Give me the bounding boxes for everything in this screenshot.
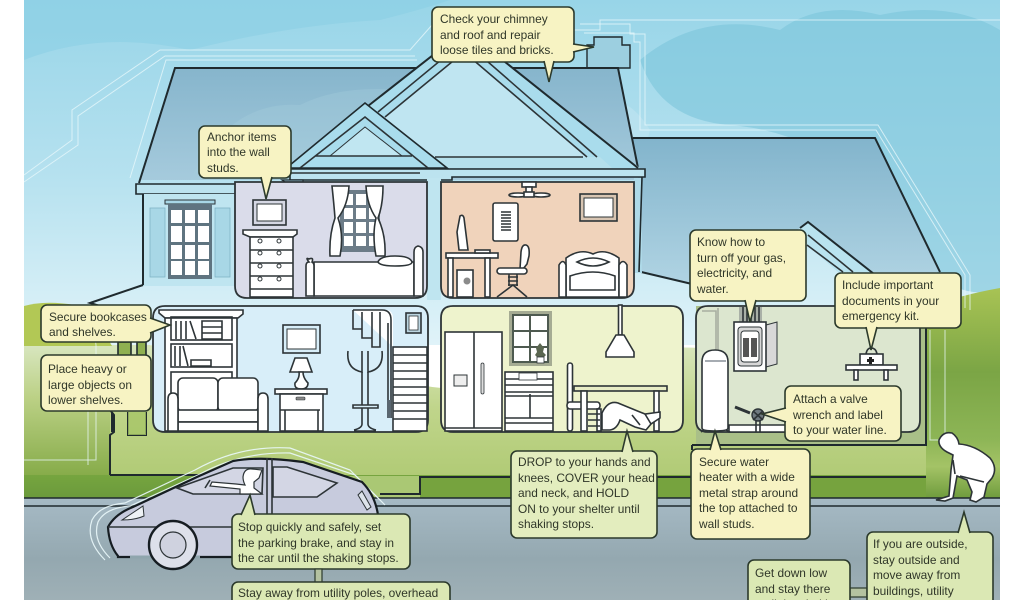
callout: water heater: wall studs. — [698, 517, 755, 531]
dresser — [243, 230, 297, 297]
kneeling person — [936, 433, 995, 502]
callout: outside: move away from — [873, 568, 960, 582]
callout: documents: Include important — [842, 278, 934, 292]
callout: bookcases — [41, 305, 170, 342]
desk and computer — [446, 215, 498, 297]
callout: heavy objects: large objects on — [48, 378, 132, 392]
water heater — [701, 350, 730, 432]
coat rack — [348, 351, 382, 431]
callout: drop cover hold on: knees, COVER your head — [518, 471, 655, 485]
callout: drop cover hold on: DROP to your hands and — [518, 455, 651, 469]
left window — [150, 200, 230, 279]
foundation strip — [420, 477, 926, 497]
callout: utilities — [690, 230, 806, 322]
callout: drop cover hold on — [511, 431, 657, 538]
right small gable — [800, 222, 872, 272]
stairs — [353, 310, 427, 431]
lamp and table — [275, 358, 327, 431]
bedroom window — [330, 186, 385, 256]
room: bedroom — [235, 182, 427, 298]
car — [90, 448, 385, 569]
callout: utilities: Know how to — [697, 235, 765, 249]
motion lines — [90, 448, 380, 560]
callout: water heater: the top attached to — [699, 501, 798, 515]
bookcase — [159, 310, 243, 431]
window — [509, 311, 552, 366]
callout: bookcases: and shelves. — [49, 325, 116, 339]
callout: water heater: heater with a wide — [699, 470, 795, 484]
office picture — [580, 194, 617, 221]
ceiling fan — [509, 182, 550, 197]
stove — [505, 372, 553, 431]
first aid kit — [846, 348, 897, 380]
small frame — [406, 313, 421, 333]
callout: get down low — [748, 560, 850, 600]
poster — [493, 203, 518, 241]
callout: outside — [867, 512, 993, 600]
callout: documents — [835, 273, 961, 350]
callout: stop the car: Stop quickly and safely, set — [238, 520, 382, 534]
callout: utilities: electricity, and — [697, 266, 772, 280]
callout: stop the car: the parking brake, and stay in — [238, 536, 394, 550]
room: utility — [696, 306, 920, 432]
plant — [535, 343, 546, 363]
callout: stop the car: the car until the shaking stops. — [238, 551, 399, 565]
callout: water heater: metal strap around — [699, 486, 798, 500]
office bed — [559, 252, 627, 297]
callout: anchor: Anchor items — [207, 130, 276, 144]
callout: documents: emergency kit. — [842, 309, 919, 323]
bed — [306, 246, 423, 296]
left lower walls and foundation — [110, 410, 146, 475]
callout: valve wrench: wrench and label — [792, 408, 883, 422]
sofa — [168, 378, 268, 431]
callout: drop cover hold on: ON to your shelter until — [518, 502, 640, 516]
callout: documents: documents in your — [842, 294, 939, 308]
large gable — [293, 30, 640, 168]
room: living room — [153, 306, 428, 432]
callout: utilities: water. — [696, 282, 729, 296]
callout: outside: buildings, utility — [873, 584, 954, 598]
car wheel — [130, 556, 200, 558]
person under table — [588, 402, 660, 430]
driver — [210, 469, 262, 494]
callout: chimney: loose tiles and bricks. — [440, 43, 554, 57]
callout: outside: If you are outside, — [873, 537, 968, 551]
room: office — [441, 182, 634, 298]
callout: stop the car — [232, 495, 410, 583]
callout: water heater — [691, 431, 810, 539]
car body — [108, 459, 378, 557]
callout: drop cover hold on: and neck, and HOLD — [518, 486, 629, 500]
callout: anchor: into the wall — [207, 145, 270, 159]
callout: valve wrench: Attach a valve — [793, 392, 868, 406]
ground and hills — [24, 288, 1000, 498]
callout: get down low: and stay there — [755, 582, 831, 596]
callout: heavy objects: Place heavy or — [48, 362, 127, 376]
callout: utilities: turn off your gas, — [697, 251, 786, 265]
pipes — [702, 308, 790, 432]
rear lamp — [358, 491, 371, 510]
shake lines around house — [24, 20, 1000, 465]
utility backing — [696, 306, 926, 445]
sky background — [24, 0, 1000, 345]
right wing roof — [633, 138, 940, 284]
pendant lamp — [606, 305, 634, 357]
small gable — [290, 103, 447, 168]
callout: chimney: Check your chimney — [440, 12, 548, 26]
callout: bookcases: Secure bookcases — [49, 310, 147, 324]
chair and table — [567, 363, 667, 431]
eaves — [290, 169, 645, 180]
walls — [143, 194, 235, 286]
callout: outside: stay outside and — [873, 553, 960, 567]
chimney — [587, 37, 630, 68]
chair — [497, 245, 529, 297]
house — [90, 30, 940, 497]
callout: connector — [850, 588, 867, 597]
callout: anchor — [199, 126, 291, 199]
callout: utility poles: Stay away from utility poles, overhead — [238, 586, 438, 600]
callout: water heater: Secure water — [699, 455, 769, 469]
callout: heavy objects — [41, 355, 151, 411]
wall picture — [253, 200, 286, 225]
callout: get down low: Get down low — [755, 566, 827, 580]
callout: chimney — [432, 7, 594, 82]
callout: valve wrench: to your water line. — [793, 423, 887, 437]
main roof — [138, 68, 638, 182]
electrical panel — [734, 307, 777, 371]
callout: anchor: studs. — [207, 161, 239, 175]
car windows — [177, 468, 263, 494]
car front lamp — [122, 506, 144, 520]
valve and wrench — [735, 407, 764, 421]
picture — [283, 325, 320, 353]
callout: valve wrench — [762, 386, 901, 441]
callout: chimney: and roof and repair — [440, 28, 541, 42]
callout: heavy objects: lower shelves. — [48, 393, 123, 407]
room: kitchen — [441, 305, 683, 432]
fridge — [445, 332, 502, 431]
callout: drop cover hold on: shaking stops. — [518, 517, 594, 531]
road — [24, 498, 1000, 600]
